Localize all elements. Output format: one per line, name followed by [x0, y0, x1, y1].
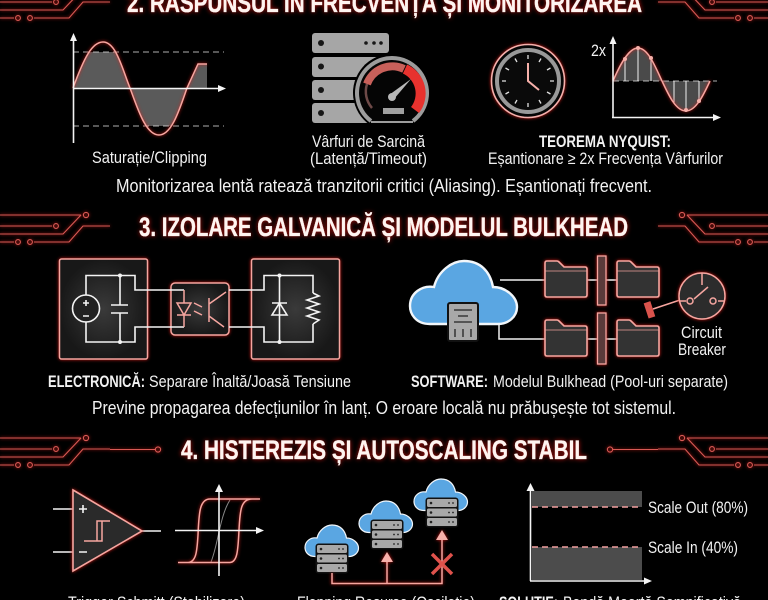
bottom captions [68, 594, 742, 600]
divider [383, 256, 385, 388]
icon: cloud with server [410, 261, 517, 341]
chart: Nyquist sampling: 2x [591, 42, 607, 60]
label: electronics: Separare Înaltă/Joasă Tensiune [149, 372, 351, 391]
icon: cloud server 2 [359, 501, 412, 550]
icon: cloud server 3 [414, 479, 468, 528]
label: circuit breaker [678, 324, 726, 359]
section 2 summary: Monitorizarea lentă ratează tranzitorii critici (Aliasing). Eșantionați frecvent. [116, 175, 652, 196]
arrows [332, 530, 448, 584]
divider [271, 33, 273, 164]
label: electronics: ELECTRONICĂ: [48, 372, 145, 391]
panel: source circuit [60, 259, 148, 359]
section separator [0, 204, 768, 206]
label: software: SOFTWARE: [411, 373, 488, 391]
label: circuit breaker: Circuit [681, 324, 722, 342]
chart: dead band thresholds: Scale In (40%) [648, 538, 738, 557]
section 2 header circuit traces [0, 0, 768, 20]
section 4 title: 4. HISTEREZIS ȘI AUTOSCALING STABIL [181, 435, 587, 465]
label: software [411, 373, 728, 391]
diagram: galvanic isolation circuit [60, 259, 340, 359]
chart: hysteresis loop [175, 484, 264, 576]
icon: circuit breaker [644, 273, 725, 319]
label: Nyquist theorem: TEOREMA NYQUIST: [539, 133, 671, 151]
chart: Nyquist sampling [591, 36, 721, 121]
label: load spikes: Vârfuri de Sarcină [312, 133, 426, 151]
icon: Schmitt trigger op-amp [53, 490, 161, 571]
label: Nyquist theorem: Eșantionare ≥ 2x Frecvența Vârfurilor [488, 150, 723, 168]
diagram: bulkhead [410, 256, 726, 364]
section 4 header circuit traces [0, 435, 768, 467]
label: load spikes: (Latență/Timeout) [310, 150, 427, 168]
icon: folders and bulkheads [545, 256, 659, 364]
chart: dead band thresholds [526, 483, 748, 584]
label: electronics [48, 372, 351, 391]
icon: red cross [432, 554, 452, 574]
section 3 title: 3. IZOLARE GALVANICĂ ȘI MODELUL BULKHEAD [139, 212, 628, 242]
section 3 header circuit traces [0, 212, 768, 244]
label: circuit breaker: Breaker [678, 341, 726, 359]
icon: server rack with gauge [312, 33, 431, 125]
label: Nyquist theorem [488, 133, 723, 168]
panel: optocoupler [171, 283, 229, 335]
icon: cloud server 1 [305, 525, 358, 574]
label: saturation: Saturație/Clipping [92, 149, 207, 167]
chart: saturation clipping sine [70, 33, 226, 143]
diagram: flapping clouds [305, 479, 468, 584]
label: load spikes [310, 133, 427, 168]
section separator [0, 426, 768, 428]
panel: load circuit [252, 259, 340, 359]
label: software: Modelul Bulkhead (Pool-uri separate) [493, 373, 728, 391]
section 3 summary: Previne propagarea defecțiunilor în lanț. O eroare locală nu prăbușește tot sistemul. [92, 397, 676, 418]
icon: clock [492, 44, 564, 118]
